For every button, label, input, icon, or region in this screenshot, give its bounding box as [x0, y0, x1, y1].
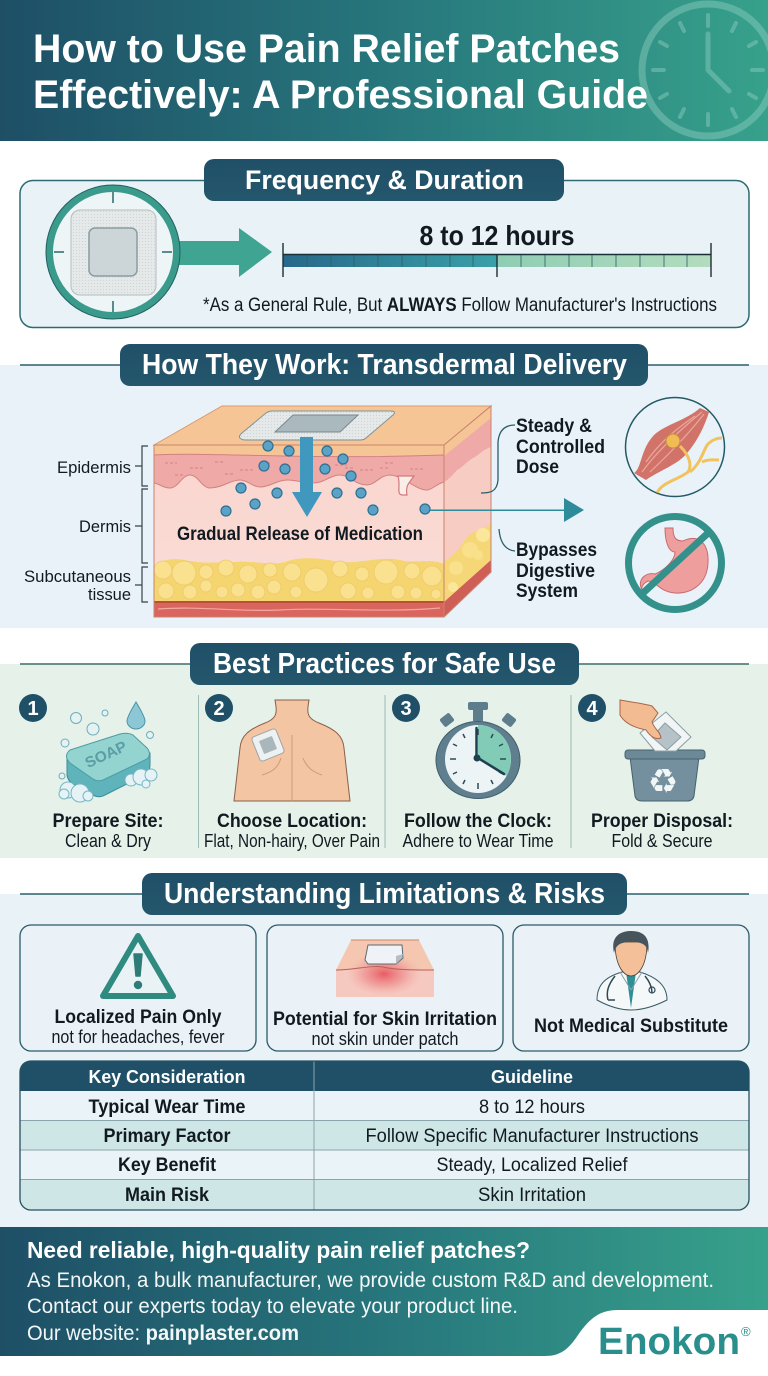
- table row: key benefit: Key Benefit: [118, 1155, 217, 1176]
- panel: limitations and risks: [0, 873, 768, 1227]
- card: potential for skin irritation: [267, 925, 503, 1051]
- callout: steady dose: Dose: [516, 457, 559, 478]
- icon: patch inside clock ring: [46, 185, 180, 319]
- header banner: [0, 0, 768, 141]
- card: not medical substitute: [513, 925, 749, 1051]
- card text: Localized Pain Only: [54, 1007, 222, 1028]
- icon: soap: SOAP: [83, 738, 130, 772]
- callout: steady dose: [481, 416, 605, 493]
- step 2: choose location: [204, 694, 380, 851]
- medication particles: [221, 441, 430, 516]
- table: key considerations: [20, 1061, 749, 1210]
- heading: frequency and duration: Frequency & Duration: [245, 165, 524, 195]
- table row: typical wear time: 8 to 12 hours: [479, 1097, 585, 1118]
- icon: soap: [59, 702, 157, 802]
- table header: [20, 1061, 749, 1091]
- skin right face: [444, 406, 491, 617]
- heading: frequency and duration: [204, 159, 564, 201]
- step text: Follow the Clock:: [404, 811, 552, 832]
- footer body text: As Enokon, a bulk manufacturer, we provide custom R&D and development.: [27, 1269, 714, 1292]
- table header: Key Consideration: [88, 1067, 246, 1087]
- table header: Guideline: [491, 1067, 573, 1087]
- icon: warning triangle: [103, 936, 173, 996]
- number badge 2: [205, 694, 233, 722]
- arrow: medication downward: [292, 437, 322, 517]
- card text: Potential for Skin Irritation: [273, 1009, 497, 1030]
- icon: hand: [620, 700, 661, 739]
- number badge 3: [392, 694, 420, 722]
- logo: Enokon: ®: [741, 1324, 751, 1339]
- panel: frequency and duration: [20, 159, 749, 328]
- heading: limitations and risks: Understanding Limitations & Risks: [164, 878, 605, 910]
- number badge 4: 4: [586, 698, 598, 720]
- panel: how they work: [0, 344, 768, 628]
- table shaded rows: [20, 1121, 749, 1210]
- patch on skin: [239, 411, 394, 440]
- step text: [591, 811, 733, 851]
- callout: bypasses digestive system: System: [516, 581, 578, 602]
- step 1: prepare site: [19, 694, 164, 851]
- epidermis layer: [154, 454, 444, 490]
- skin top face: [154, 406, 491, 445]
- table row: key benefit: [118, 1155, 628, 1176]
- logo: Enokon: Enokon: [598, 1321, 740, 1363]
- heading: how they work: How They Work: Transdermal Delivery: [142, 349, 627, 381]
- icon: stopwatch: [436, 702, 520, 798]
- table row: primary factor: Primary Factor: [104, 1126, 231, 1147]
- callout: bypasses digestive system: Digestive: [516, 561, 595, 582]
- number badge 1: 1: [27, 698, 39, 720]
- step text: [204, 811, 380, 851]
- step text: [402, 811, 554, 851]
- card text: not skin under patch: [312, 1029, 458, 1049]
- card text: [52, 1007, 225, 1047]
- table row: typical wear time: [88, 1097, 585, 1118]
- icon: muscle and nerve: [626, 398, 724, 496]
- callout: bypasses digestive system: [499, 529, 597, 602]
- step text: Adhere to Wear Time: [402, 831, 554, 851]
- skin cross-section diagram: [154, 406, 491, 617]
- step text: Choose Location:: [217, 811, 367, 832]
- title: [33, 27, 648, 117]
- table row: main risk: [125, 1185, 586, 1206]
- heading: best practices: Best Practices for Safe Use: [213, 648, 556, 680]
- muscle layer: [154, 601, 444, 617]
- footer body text: Our website: painplaster.com: [27, 1322, 299, 1345]
- step text: Fold & Secure: [612, 831, 712, 851]
- icon: doctor: [597, 931, 667, 1010]
- step 3: follow the clock: [392, 694, 554, 851]
- footer body text: [27, 1269, 714, 1345]
- icon: back with patch: [234, 700, 350, 801]
- number badge 3: 3: [400, 698, 412, 720]
- layer labels: tissue: [88, 585, 131, 604]
- table row: typical wear time: Typical Wear Time: [88, 1097, 246, 1118]
- arrow: to target: [430, 498, 584, 522]
- icon: header clock: [642, 4, 768, 136]
- step text: [52, 811, 164, 851]
- icon: patch being discarded: [640, 712, 691, 751]
- card text: [273, 1009, 497, 1049]
- footer heading: Need reliable, high-quality pain relief patches?: [27, 1237, 530, 1263]
- title: How to Use Pain Relief Patches: [33, 27, 620, 71]
- icon: trash bin: ♻: [648, 762, 678, 802]
- table row: primary factor: [104, 1126, 698, 1147]
- footer call to action: [0, 1227, 768, 1363]
- diagram caption: Gradual Release of Medication: [177, 524, 423, 545]
- icon: irritated skin: [336, 940, 434, 997]
- step text: Proper Disposal:: [591, 811, 733, 832]
- table row: primary factor: Follow Specific Manufacturer Instructions: [366, 1126, 698, 1147]
- card: localized pain only: [20, 925, 256, 1051]
- table row: main risk: Skin Irritation: [478, 1185, 586, 1206]
- footer body text: Contact our experts today to elevate your product line.: [27, 1295, 518, 1318]
- icon: stomach with prohibition: [628, 516, 722, 610]
- number badge 4: [578, 694, 606, 722]
- step text: Flat, Non-hairy, Over Pain: [204, 831, 380, 851]
- step text: Clean & Dry: [65, 831, 151, 851]
- callout: bypasses digestive system: Bypasses: [516, 540, 597, 561]
- duration timeline: [283, 243, 711, 277]
- dermis layer: [154, 445, 444, 617]
- icon: arrow: [175, 228, 272, 277]
- duration label: 8 to 12 hours: [420, 220, 574, 251]
- stratum top band: [154, 445, 444, 456]
- table row: key benefit: Steady, Localized Relief: [436, 1155, 628, 1176]
- table row: main risk: Main Risk: [125, 1185, 209, 1206]
- layer labels: Subcutaneous: [24, 567, 131, 586]
- step text: Prepare Site:: [52, 811, 164, 832]
- subcutaneous fat: [154, 558, 444, 602]
- number badge 1: [19, 694, 47, 722]
- number badge 2: 2: [213, 698, 225, 720]
- title: Effectively: A Professional Guide: [33, 73, 648, 117]
- layer labels: Dermis: [79, 517, 131, 536]
- panel: best practices: [0, 643, 768, 858]
- layer labels: [24, 446, 148, 604]
- layer labels: Epidermis: [57, 458, 131, 477]
- card text: Not Medical Substitute: [534, 1016, 728, 1037]
- card text: not for headaches, fever: [52, 1027, 225, 1047]
- callout: steady dose: Steady &: [516, 416, 592, 437]
- footnote: *As a General Rule, But ALWAYS Follow Manufacturer's Instructions: [203, 295, 717, 316]
- hair follicle: [398, 476, 414, 495]
- step 4: proper disposal: [578, 694, 733, 851]
- icon: trash bin: [625, 750, 705, 802]
- callout: steady dose: Controlled: [516, 437, 605, 458]
